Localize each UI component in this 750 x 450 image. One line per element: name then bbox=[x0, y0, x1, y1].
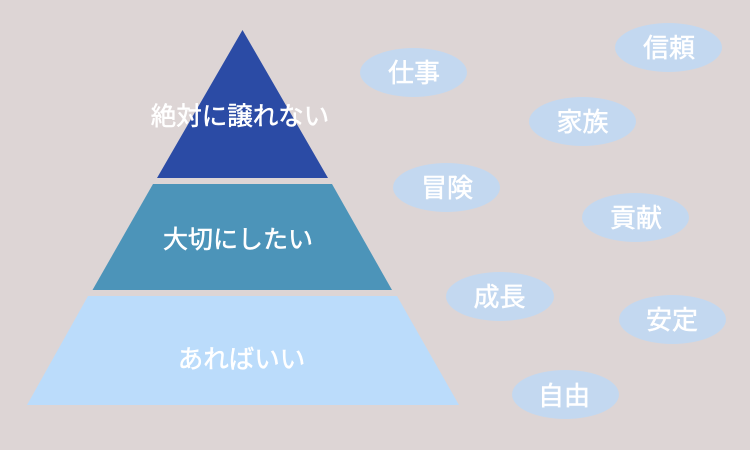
bubble: 冒険: 冒険 bbox=[421, 173, 473, 203]
pyramid bottom tier: あればいい bbox=[178, 346, 305, 374]
bubble: 仕事: 仕事 bbox=[388, 58, 440, 88]
pyramid bottom tier bbox=[27, 296, 459, 405]
bubble: 安定: 安定 bbox=[646, 305, 698, 335]
bubble: 安定 bbox=[619, 295, 726, 344]
panel: value pyramid bbox=[27, 30, 459, 405]
panel: value word bubbles bbox=[360, 23, 726, 419]
bubble: 信頼 bbox=[615, 23, 722, 72]
bubble: 自由 bbox=[512, 370, 619, 419]
bubble: 貢献: 貢献 bbox=[610, 203, 662, 233]
pyramid middle tier bbox=[92, 184, 392, 290]
bubble: 成長: 成長 bbox=[473, 282, 526, 312]
bubble: 自由: 自由 bbox=[538, 381, 590, 411]
bubble: 貢献 bbox=[582, 193, 689, 242]
bubble: 仕事 bbox=[360, 48, 467, 97]
bubble: 成長 bbox=[446, 272, 554, 321]
bubble: 信頼: 信頼 bbox=[643, 33, 695, 63]
pyramid top tier bbox=[151, 30, 329, 178]
bubble: 家族: 家族 bbox=[556, 107, 609, 137]
bubble: 冒険 bbox=[393, 163, 500, 212]
bubble: 家族 bbox=[529, 97, 636, 146]
pyramid top tier: 絶対に譲れない bbox=[151, 103, 329, 131]
pyramid middle tier: 大切にしたい bbox=[163, 226, 313, 254]
